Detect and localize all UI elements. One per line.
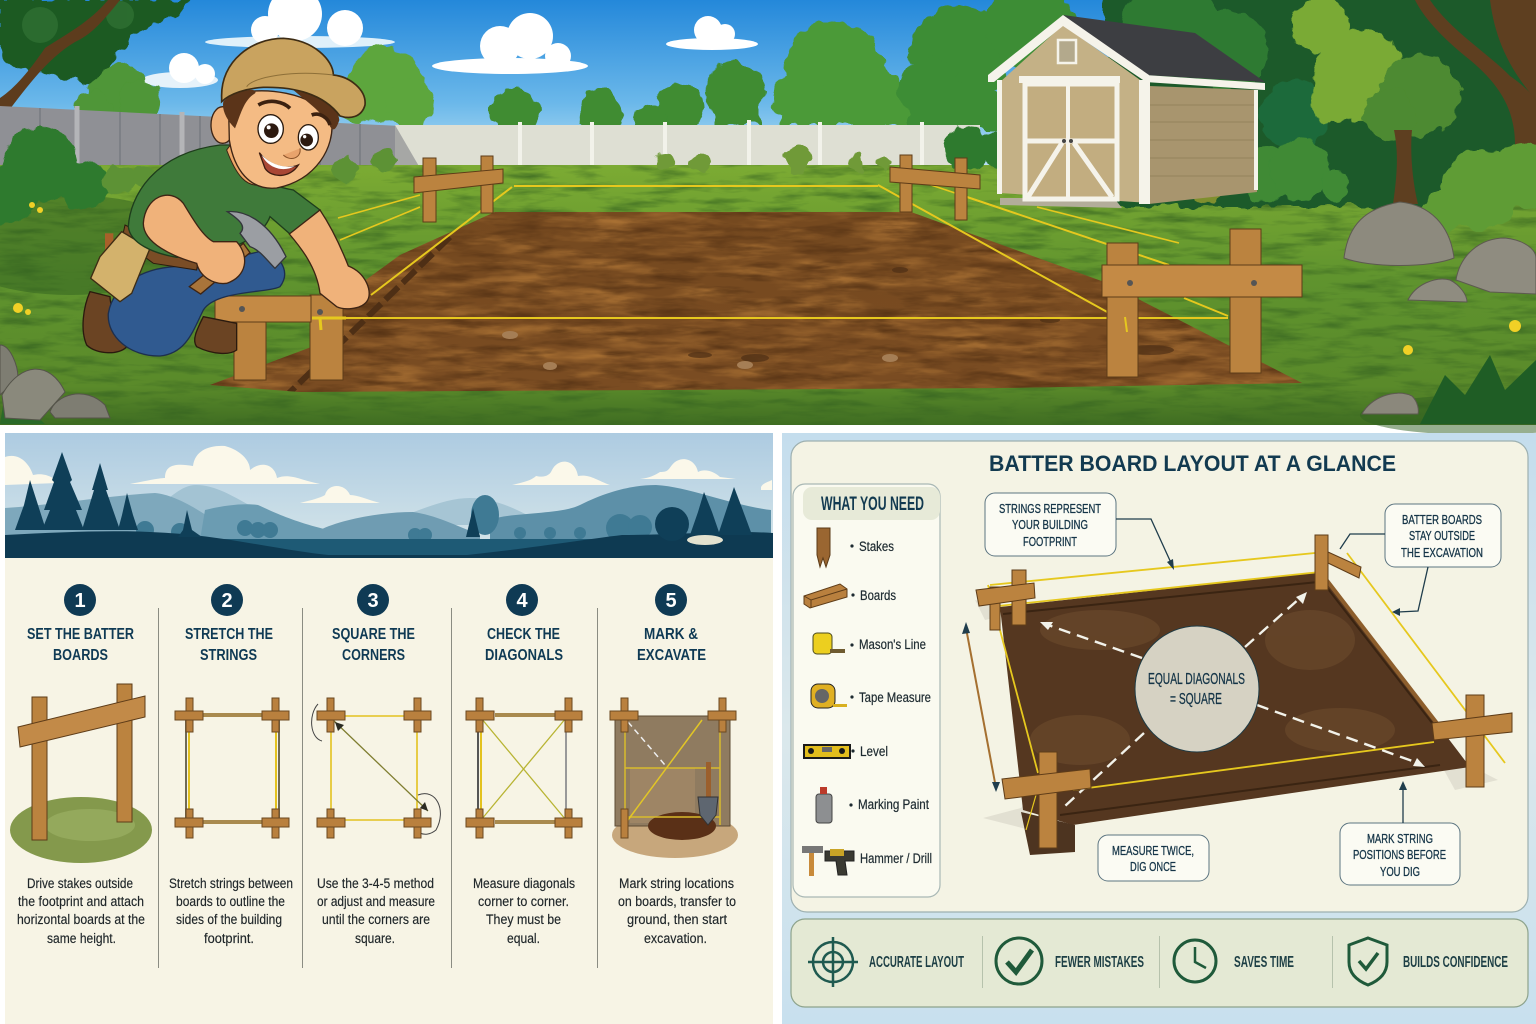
tool pouch xyxy=(91,232,150,302)
item: mason's line xyxy=(813,633,926,654)
item: marking paint: Marking Paint xyxy=(858,797,929,812)
nose and mouth xyxy=(259,148,300,175)
front boot xyxy=(195,317,237,353)
heading 3: SQUARE THE xyxy=(332,626,415,643)
text 2 xyxy=(169,876,293,946)
benefit: saves time: SAVES TIME xyxy=(1234,954,1294,971)
text 4 xyxy=(473,876,575,946)
badge 4: 4 xyxy=(516,590,528,612)
callout: strings: FOOTPRINT xyxy=(1023,534,1077,549)
callout: batter boards: BATTER BOARDS xyxy=(1402,512,1482,527)
shed pad xyxy=(1000,198,1122,208)
heading 3: CORNERS xyxy=(342,647,405,664)
flowers xyxy=(13,202,1521,355)
callout: batter boards xyxy=(1340,504,1501,616)
benefit: builds confidence xyxy=(1349,938,1508,985)
badge 1: 1 xyxy=(74,590,86,612)
batter board: back left xyxy=(414,156,503,222)
shed side wall xyxy=(1149,86,1257,204)
callout: batter boards: STAY OUTSIDE xyxy=(1409,528,1475,543)
belt xyxy=(122,225,198,270)
text 4: corner to corner. xyxy=(478,894,569,909)
heading 5: MARK & xyxy=(644,626,698,643)
heading 4: CHECK THE xyxy=(487,626,560,643)
badge 2 xyxy=(211,584,243,616)
ear xyxy=(211,107,234,143)
item: stakes xyxy=(817,528,894,567)
illustration: excavation xyxy=(610,698,738,858)
center badge: EQUAL DIAGONALS xyxy=(1148,671,1245,688)
step 1 xyxy=(10,584,152,946)
text 5: on boards, transfer to xyxy=(618,894,736,909)
pit below post xyxy=(1021,812,1075,855)
right column backdrop xyxy=(782,433,1536,1024)
text 1: same height. xyxy=(47,931,116,946)
batter board: front right xyxy=(1102,229,1302,377)
what you need heading: WHAT YOU NEED xyxy=(821,494,924,515)
benefit: accurate layout xyxy=(808,937,964,987)
hero scene: backyard layout xyxy=(0,0,1536,435)
neck xyxy=(227,137,277,185)
callout: mark string positions: YOU DIG xyxy=(1380,864,1420,879)
right tree trunks xyxy=(1393,0,1536,204)
item: level: Level xyxy=(860,744,888,759)
badge 2: 2 xyxy=(221,590,233,612)
illustration: diagonals xyxy=(466,698,582,838)
illustration: square corners xyxy=(312,698,440,838)
center badge: = SQUARE xyxy=(1170,691,1222,708)
panel: how-to steps xyxy=(5,433,773,1024)
badge 1 xyxy=(64,584,96,616)
item: hammer and drill xyxy=(802,846,932,876)
text 2: boards to outline the xyxy=(176,894,285,909)
hair xyxy=(223,90,339,129)
callout: mark string positions: MARK STRING xyxy=(1367,831,1433,846)
callout: strings: STRINGS REPRESENT xyxy=(999,501,1101,516)
board bottom left xyxy=(1002,752,1091,848)
item: stakes: Stakes xyxy=(859,539,894,554)
callout: strings: YOUR BUILDING xyxy=(1012,517,1088,532)
sky xyxy=(0,0,1536,172)
text 1: horizontal boards at the xyxy=(17,912,145,927)
panel: layout at a glance xyxy=(791,441,1528,912)
text 2: Stretch strings between xyxy=(169,876,293,891)
lawn xyxy=(0,165,1536,425)
board right xyxy=(1432,695,1512,787)
badge 5 xyxy=(655,584,687,616)
diagonal arrowheads xyxy=(1040,592,1425,767)
heading 4: DIAGONALS xyxy=(485,647,563,664)
text 5 xyxy=(618,876,736,946)
panel: what you need xyxy=(793,484,940,897)
benefit: fewer mistakes xyxy=(996,938,1144,984)
shed doors xyxy=(1019,76,1120,199)
shed window xyxy=(1058,40,1076,63)
batter board: front left xyxy=(215,295,346,380)
excavation dirt xyxy=(210,212,1302,392)
callout: measure twice xyxy=(1098,835,1209,881)
shadows xyxy=(975,600,1498,830)
item: level xyxy=(804,744,888,759)
forest right of shed xyxy=(1105,0,1536,230)
heading 3 xyxy=(332,626,415,664)
text 5: ground, then start xyxy=(627,912,727,927)
board back right xyxy=(1315,535,1361,590)
badge 5: 5 xyxy=(665,590,677,612)
title: BATTER BOARD LAYOUT AT A GLANCE xyxy=(989,451,1396,476)
callout: measure twice: DIG ONCE xyxy=(1130,859,1176,874)
benefit: saves time xyxy=(1174,940,1294,982)
heading 1: SET THE BATTER xyxy=(27,626,134,643)
step 3 xyxy=(312,584,440,946)
shed front wall xyxy=(1000,25,1149,203)
shed xyxy=(988,15,1265,208)
white fence back xyxy=(395,120,980,169)
clouds xyxy=(142,0,758,88)
lawn shadows xyxy=(0,195,1536,435)
text 1 xyxy=(17,876,145,946)
text 5: Mark string locations xyxy=(619,876,734,891)
center badge xyxy=(1135,626,1259,752)
rocks xyxy=(0,202,1536,420)
callout: batter boards: THE EXCAVATION xyxy=(1401,545,1483,560)
item: tape measure: Tape Measure xyxy=(859,690,931,705)
heading 2: STRETCH THE xyxy=(185,626,273,643)
yellow strings xyxy=(988,552,1505,830)
heading 1: BOARDS xyxy=(53,647,108,664)
banner mid ground xyxy=(136,495,652,542)
heading 4 xyxy=(485,626,563,664)
text 4: Measure diagonals xyxy=(473,876,575,891)
text 2: sides of the building xyxy=(176,912,282,927)
text 5: excavation. xyxy=(644,931,707,946)
tree top-left xyxy=(0,0,192,122)
step 2 xyxy=(169,584,293,946)
text 1: the footprint and attach xyxy=(18,894,144,909)
grey fence left xyxy=(0,106,400,190)
item: marking paint xyxy=(816,787,929,823)
shed trim xyxy=(988,15,1265,204)
right arm xyxy=(289,210,369,309)
text 3: square. xyxy=(355,931,395,946)
head xyxy=(228,91,332,188)
step 5 xyxy=(610,584,738,946)
text 3: or adjust and measure xyxy=(317,894,435,909)
item: tape measure xyxy=(811,684,931,708)
text 3: Use the 3-4-5 method xyxy=(317,876,434,891)
step 4 xyxy=(466,584,582,946)
layout strings xyxy=(338,180,1228,318)
callout: mark string positions: POSITIONS BEFORE xyxy=(1353,847,1446,862)
text 4: They must be xyxy=(486,912,561,927)
badge 3 xyxy=(357,584,389,616)
illustration: strings outline xyxy=(175,698,289,838)
landscape banner xyxy=(5,433,773,558)
heading 5 xyxy=(637,626,706,664)
footprint dirt xyxy=(1000,573,1470,825)
dirt texture xyxy=(200,205,1310,397)
text 1: Drive stakes outside xyxy=(27,876,133,891)
what you need heading xyxy=(803,487,940,520)
dividers xyxy=(158,608,598,968)
bushes xyxy=(0,126,1536,424)
side measure arrow xyxy=(962,622,1000,792)
heading 5: EXCAVATE xyxy=(637,647,706,664)
item: boards: Boards xyxy=(860,588,896,603)
item: hammer and drill: Hammer / Drill xyxy=(860,851,932,866)
lawn texture xyxy=(0,165,1536,425)
shed roof xyxy=(1063,15,1265,82)
eyes xyxy=(258,101,330,150)
soil texture xyxy=(1003,578,1446,815)
shirt xyxy=(128,145,320,257)
text 3 xyxy=(317,876,435,946)
item: mason's line: Mason's Line xyxy=(859,637,926,652)
board back left xyxy=(976,570,1035,630)
heading 1 xyxy=(27,626,134,664)
callout: mark string positions xyxy=(1340,781,1460,885)
text 2: footprint. xyxy=(204,931,254,946)
dashed diagonals xyxy=(1048,598,1415,807)
left arm xyxy=(143,195,245,284)
text 3: until the corners are xyxy=(322,912,430,927)
batter board: back right xyxy=(890,155,980,220)
text 4: equal. xyxy=(507,931,540,946)
badge 3: 3 xyxy=(367,590,379,612)
hammer xyxy=(189,212,286,294)
callout: measure twice: MEASURE TWICE, xyxy=(1112,843,1194,858)
illustration: batter board on grass xyxy=(10,684,152,863)
callout: strings xyxy=(985,493,1174,570)
item: boards xyxy=(804,584,896,608)
badge 4 xyxy=(506,584,538,616)
ground plan diagram xyxy=(962,535,1512,855)
heading 2: STRINGS xyxy=(200,647,257,664)
benefit: accurate layout: ACCURATE LAYOUT xyxy=(869,954,964,971)
back boot xyxy=(83,292,127,353)
background trees xyxy=(77,0,1074,136)
heading 2 xyxy=(185,626,273,664)
jeans xyxy=(108,250,285,356)
cap xyxy=(222,38,365,117)
worker character xyxy=(83,38,369,356)
panel: benefits bar xyxy=(791,919,1528,1007)
benefit: fewer mistakes: FEWER MISTAKES xyxy=(1055,954,1144,971)
